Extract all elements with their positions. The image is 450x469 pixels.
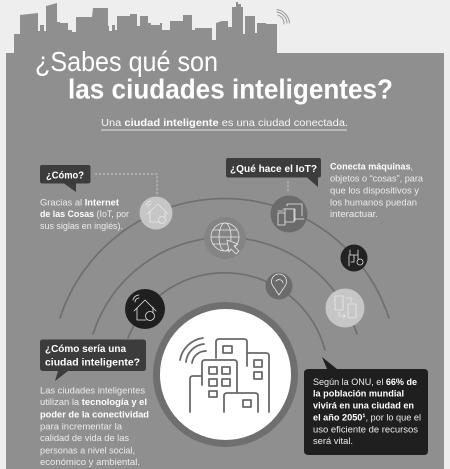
dashed connector: que hace [287,181,289,193]
callout: como seria: ciudad inteligente? [45,356,140,368]
central city circle [156,306,294,444]
text: las ciudades inteligentes: económico y ambiental. [40,456,140,467]
text: las ciudades inteligentes [40,384,149,467]
node: smart plug [340,244,368,272]
callout: que hace el IoT [226,158,321,187]
node: connected devices [270,196,308,232]
title [35,46,393,104]
text: conecta [330,160,424,219]
text: conecta: los humanos puedan [330,196,417,207]
callout: ONU: el año 2050¹, por lo que el [313,412,421,423]
callout: como [40,165,90,192]
title: las ciudades inteligentes? [68,74,393,104]
node: phones exchange [326,288,364,328]
concentric arcs [60,199,389,350]
node: smart home (dark) [125,289,165,329]
text: conecta: Conecta máquinas, [330,160,413,171]
callout: ONU: vivirá en una ciudad en [313,399,414,410]
icon: skyline wifi signal [277,10,290,24]
callout: como seria [40,340,146,381]
text: gracias: Gracias al Internet [40,196,119,207]
text: conecta: interactuar. [330,208,378,219]
icon: city buildings [180,338,269,412]
callout: ONU: Según la ONU, el 66% de [313,376,417,387]
callout: ONU: será vital. [313,435,353,446]
callout: como seria: ¿Cómo sería una [45,343,126,355]
node: location pin [266,272,292,300]
node: globe [204,217,246,259]
text: conecta: que los dispositivos y [330,184,419,195]
text: las ciudades inteligentes: Las ciudades inteligentes [40,384,145,395]
text: las ciudades inteligentes: para incrementar la [40,420,123,431]
callout: como: ¿Cómo? [46,170,84,182]
subtitle: Una ciudad inteligente es una ciudad conectada. [101,118,348,129]
text: las ciudades inteligentes: utilizan la tecnología y el [40,396,147,407]
callout: que hace el IoT: ¿Qué hace el IoT? [230,163,317,175]
text: las ciudades inteligentes: poder de la conectividad [40,408,149,419]
text: las ciudades inteligentes: personas a nivel social, [40,444,135,455]
text: las ciudades inteligentes: calidad de vida de las [40,432,129,443]
text: gracias: sus siglas en inglés). [40,220,123,231]
text: gracias: de las Cosas (IoT, por [40,208,129,219]
callout: ONU: la población mundial [313,388,404,399]
text: conecta: objetos o “cosas”, para [330,172,424,183]
node: smart home (light) [140,196,172,230]
callout: ONU: uso eficiente de recursos [313,423,418,434]
text: gracias [40,196,129,231]
callout: ONU [304,357,428,455]
title: ¿Sabes qué son [35,46,218,77]
dashed connector: como [95,174,157,194]
